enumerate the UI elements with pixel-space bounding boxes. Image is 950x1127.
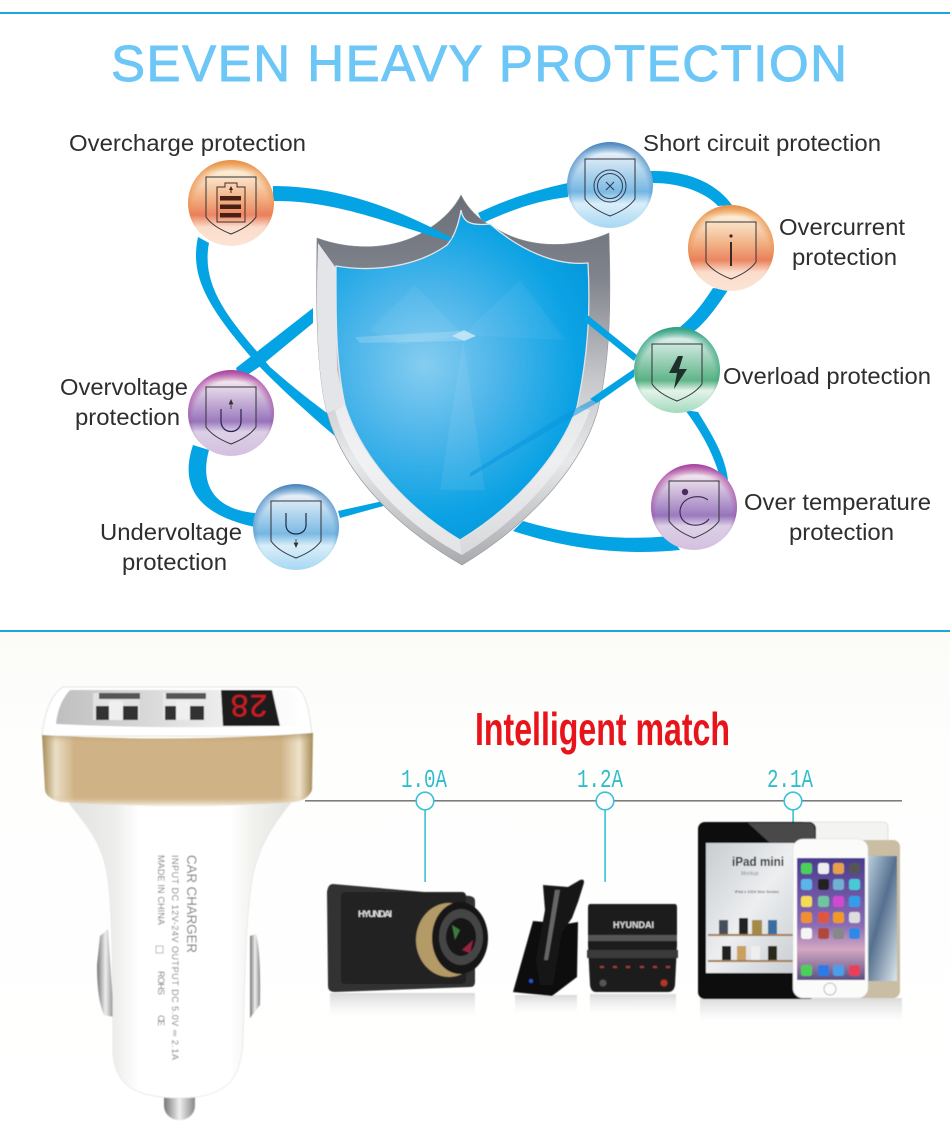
label: over temperature: Over temperature xyxy=(744,489,931,515)
orbit ribbons behind shield xyxy=(189,171,732,552)
ball: over temperature xyxy=(651,464,737,550)
label: overcurrent: protection xyxy=(792,244,897,270)
label: overcurrent xyxy=(779,214,905,270)
app icons xyxy=(801,863,860,976)
usb ports xyxy=(93,693,206,720)
ball: undervoltage xyxy=(253,484,339,570)
ball: short circuit xyxy=(567,142,653,228)
ipad mini: iPad mini xyxy=(732,854,784,869)
node: 1.0A: 1.0A xyxy=(401,765,447,795)
printed specifications: CE xyxy=(156,1015,166,1026)
camera lens xyxy=(416,902,488,977)
label: undervoltage xyxy=(100,519,242,575)
label: overload: Overload protection xyxy=(723,363,931,389)
led display: 28 xyxy=(230,685,268,722)
camera body xyxy=(327,884,475,992)
device: bluetooth headset dock xyxy=(513,880,584,1013)
ball: overcurrent xyxy=(688,205,774,291)
lower panel background xyxy=(0,632,950,1127)
camera reflection xyxy=(330,993,475,1017)
printed specifications: INPUT DC 12V-24V OUTPUT DC 5.0V ═ 2.1A xyxy=(170,855,180,1060)
white tablet xyxy=(800,822,888,862)
shield facets xyxy=(370,285,463,345)
gold phone xyxy=(850,840,900,998)
shield metal frame xyxy=(317,195,610,565)
label: overcurrent: Overcurrent xyxy=(779,214,905,240)
devices reflection xyxy=(700,998,902,1022)
label: undervoltage: Undervoltage xyxy=(100,519,242,545)
node: 2.1A xyxy=(767,765,813,810)
shield lower frame highlight xyxy=(335,405,462,555)
device: camera lens xyxy=(587,904,678,1014)
charger body xyxy=(67,800,293,1098)
printed specifications xyxy=(156,855,199,1060)
label: overvoltage: protection xyxy=(75,404,180,430)
printed specifications: MADE IN CHINA xyxy=(156,855,166,925)
iphone xyxy=(793,839,868,998)
label: overcharge: Overcharge protection xyxy=(69,130,306,156)
device: tablets and phones xyxy=(698,822,902,1022)
ball: overload xyxy=(634,327,720,413)
white top rim xyxy=(42,687,312,736)
ball: overvoltage xyxy=(188,370,274,456)
ipad mini xyxy=(698,822,816,999)
label: overvoltage xyxy=(60,374,188,430)
orbit ribbons over shield xyxy=(273,186,637,477)
printed specifications: CAR CHARGER xyxy=(184,855,199,953)
label: over temperature xyxy=(744,489,931,545)
printed specifications: ROHS xyxy=(156,971,166,995)
panel: protection diagram xyxy=(60,130,931,575)
lens brand: HYUNDAI xyxy=(613,920,654,930)
node: 1.0A xyxy=(401,765,447,810)
timeline xyxy=(305,765,902,882)
node: 1.2A xyxy=(577,765,623,810)
label: undervoltage: protection xyxy=(122,549,227,575)
heading: intelligent match: Intelligent match xyxy=(475,703,730,755)
led display xyxy=(221,685,280,726)
side clips xyxy=(97,929,260,1018)
ipad mini: iPad x 1024 Size Screen xyxy=(735,889,779,894)
shield light left side xyxy=(317,243,345,413)
node: 2.1A: 2.1A xyxy=(767,765,813,795)
camera brand: HYUNDAI xyxy=(358,909,392,920)
node: 1.2A: 1.2A xyxy=(577,765,623,795)
device: dash camera xyxy=(327,884,488,1017)
labels xyxy=(60,130,931,575)
car charger xyxy=(42,685,313,1120)
charger tip xyxy=(164,1093,195,1120)
gold band xyxy=(42,733,313,806)
ipad mini: Mockup xyxy=(741,871,759,877)
silver face xyxy=(56,690,303,727)
label: over temperature: protection xyxy=(789,519,894,545)
shield blue face xyxy=(336,210,589,540)
label: overvoltage: Overvoltage xyxy=(60,374,188,400)
shield xyxy=(317,195,610,565)
label: short circuit: Short circuit protection xyxy=(643,130,881,156)
title: SEVEN HEAVY PROTECTION xyxy=(111,35,847,92)
ball: overcharge xyxy=(188,160,274,246)
connector lines xyxy=(424,809,794,882)
